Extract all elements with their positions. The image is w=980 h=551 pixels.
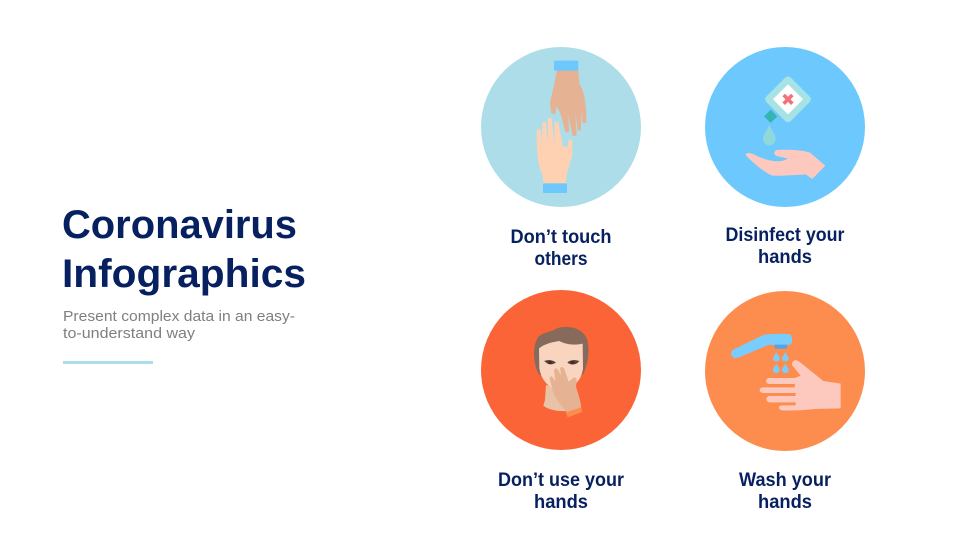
label: wash your hands: [739, 470, 832, 513]
label: disinfect your hands: hands: [758, 247, 812, 268]
label: don't use your hands: Don’t use your: [498, 470, 625, 491]
label: wash your hands: Wash your: [739, 470, 832, 491]
title: Coronavirus: [62, 203, 297, 247]
circle background: [705, 47, 865, 207]
subtitle: [63, 308, 295, 342]
panel: don't use your hands: [481, 290, 641, 450]
circle background: [481, 47, 641, 207]
accent line: [63, 361, 153, 364]
icon: two hands reaching: [537, 61, 586, 193]
subtitle: Present complex data in an easy-: [63, 308, 295, 325]
panel: wash your hands: [705, 291, 865, 451]
label: don't use your hands: [498, 470, 625, 513]
panel: don't touch others: [481, 47, 641, 207]
icon: face with hand over mouth: [534, 327, 589, 417]
label: disinfect your hands: [726, 225, 845, 268]
label: don't use your hands: hands: [534, 492, 588, 513]
circle background: [481, 290, 641, 450]
subtitle: to-understand way: [63, 325, 196, 342]
label: don't touch others: others: [534, 249, 588, 270]
label: don't touch others: [510, 227, 612, 270]
label: don't touch others: Don’t touch: [510, 227, 612, 248]
label: wash your hands: hands: [758, 492, 812, 513]
panel: disinfect your hands: [705, 47, 865, 207]
title: Infographics: [62, 252, 306, 296]
circle background: [705, 291, 865, 451]
label: disinfect your hands: Disinfect your: [726, 225, 845, 246]
icon: sanitizer bottle and hand: [746, 75, 825, 179]
title: [62, 203, 306, 296]
icon: tap and washing hand: [731, 334, 841, 410]
